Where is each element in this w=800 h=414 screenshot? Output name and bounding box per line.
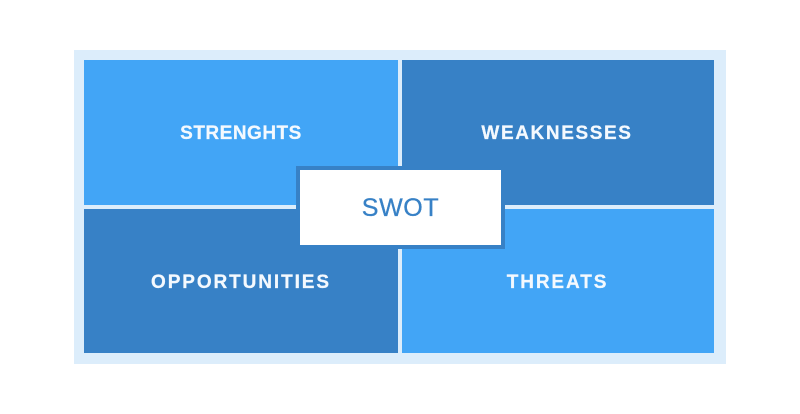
- panel: SWOT matrix: [74, 50, 726, 364]
- panel: weaknesses: [402, 60, 714, 205]
- center box: SWOT: [296, 166, 505, 249]
- panel: strengths: STRENGHTS: [180, 123, 302, 144]
- panel: threats: THREATS: [507, 272, 608, 293]
- panel: strengths: [84, 60, 398, 205]
- panel: opportunities: OPPORTUNITIES: [151, 272, 331, 293]
- panel: weaknesses: WEAKNESSES: [481, 123, 633, 144]
- panel: opportunities: [84, 209, 398, 353]
- panel: threats: [402, 209, 714, 353]
- center box: SWOT: SWOT: [362, 194, 439, 222]
